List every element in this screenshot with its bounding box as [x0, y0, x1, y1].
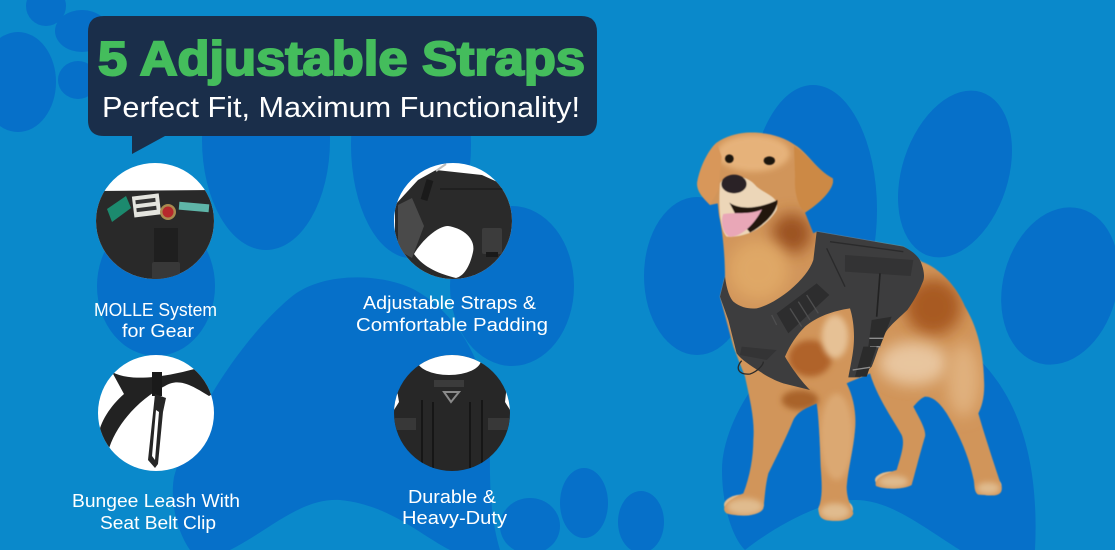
label: Heavy-Duty [402, 508, 507, 528]
rump shadow [905, 278, 962, 335]
photo: straps and padding [394, 163, 512, 279]
subtitle: Perfect Fit, Maximum Functionality! [102, 92, 580, 124]
feature: bungee leash [72, 350, 240, 533]
golden retriever wearing harness [690, 127, 1010, 527]
top panel [845, 255, 913, 276]
muzzle [719, 176, 777, 237]
near leg [820, 393, 853, 480]
belly light [878, 342, 948, 385]
chest fur [728, 240, 788, 300]
label: Comfortable Padding [356, 315, 548, 335]
label: for Gear [122, 321, 194, 341]
right ear [794, 146, 833, 213]
photo: heavy-duty back panel [394, 355, 510, 471]
title: 5 Adjustable Straps [98, 33, 585, 86]
title speech bubble [88, 16, 597, 154]
label: Seat Belt Clip [100, 513, 216, 533]
label: MOLLE System [94, 300, 217, 320]
nose [721, 175, 747, 193]
paw print: top left [0, 0, 109, 132]
photo: leash with seat belt clip [98, 355, 214, 471]
paw print: bottom small toes [500, 468, 664, 550]
tongue [722, 209, 762, 237]
feature: durable [394, 355, 510, 528]
side buckle [868, 317, 892, 347]
label: Durable & [408, 487, 496, 507]
label: Adjustable Straps & [363, 293, 536, 313]
label: Bungee Leash With [72, 491, 240, 511]
left ear [697, 143, 722, 205]
eyes [725, 154, 734, 163]
label [94, 300, 217, 341]
dog paws [724, 471, 1002, 521]
shoulder [788, 340, 832, 377]
feature: MOLLE system [95, 163, 216, 337]
photo: MOLLE patches [96, 163, 214, 279]
paw highlights [727, 498, 763, 515]
label [402, 487, 507, 528]
thigh [947, 343, 980, 417]
dog fur [690, 127, 1010, 527]
paw print: centre left [97, 30, 574, 550]
neck shadow [772, 213, 812, 253]
harness [720, 232, 924, 390]
feature: adjustable straps [356, 160, 548, 335]
forehead [717, 135, 790, 172]
label [72, 491, 240, 533]
D ring [738, 361, 763, 374]
far leg shade [782, 390, 818, 410]
bubble shape [88, 16, 597, 154]
vest body [720, 232, 924, 390]
label [356, 293, 548, 335]
paw print: right [644, 76, 1115, 550]
chest straps [777, 283, 829, 333]
mouth [729, 200, 777, 233]
dog face [719, 154, 777, 237]
